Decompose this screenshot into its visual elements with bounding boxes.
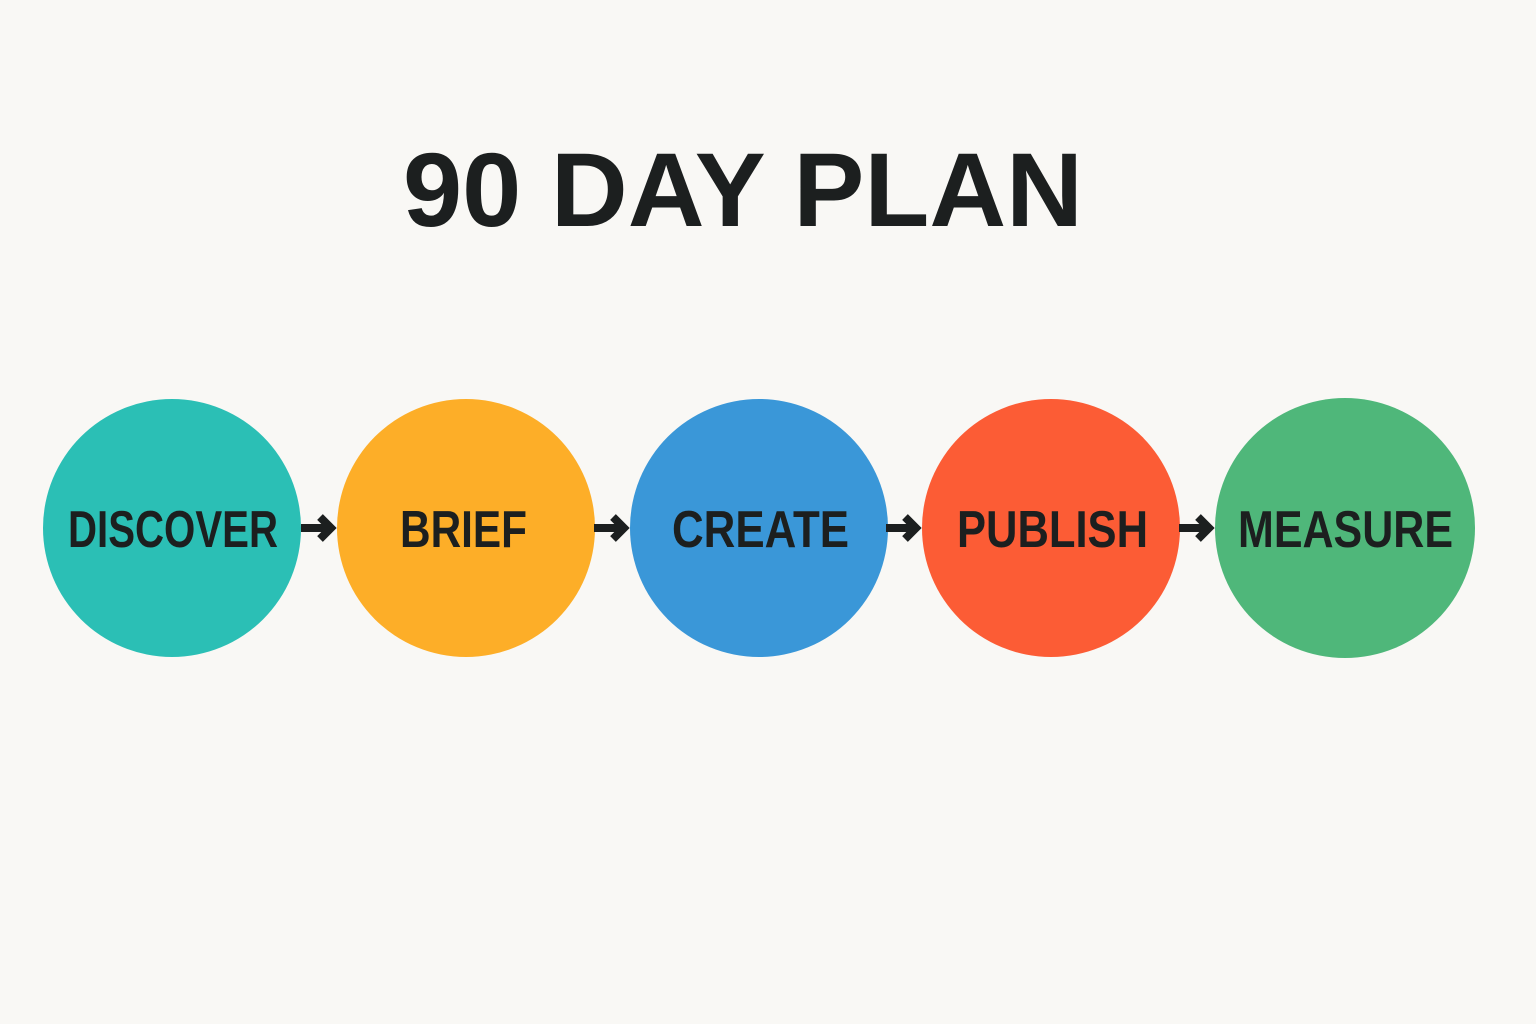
step: measure: [1215, 398, 1475, 658]
arrow 3: [886, 517, 917, 539]
step: discover: DISCOVER: [68, 501, 278, 559]
step: brief: BRIEF: [400, 501, 527, 559]
arrow 1: [301, 517, 332, 539]
arrow 2: [594, 517, 625, 539]
step: create: [630, 399, 888, 657]
step: measure: MEASURE: [1238, 501, 1453, 559]
step: create: CREATE: [672, 501, 849, 559]
step: publish: [922, 399, 1180, 657]
step: brief: [337, 399, 595, 657]
step: publish: PUBLISH: [957, 501, 1148, 559]
title: 90 DAY PLAN: [403, 132, 1083, 249]
arrow 4: [1179, 517, 1210, 539]
step: discover: [43, 399, 301, 657]
